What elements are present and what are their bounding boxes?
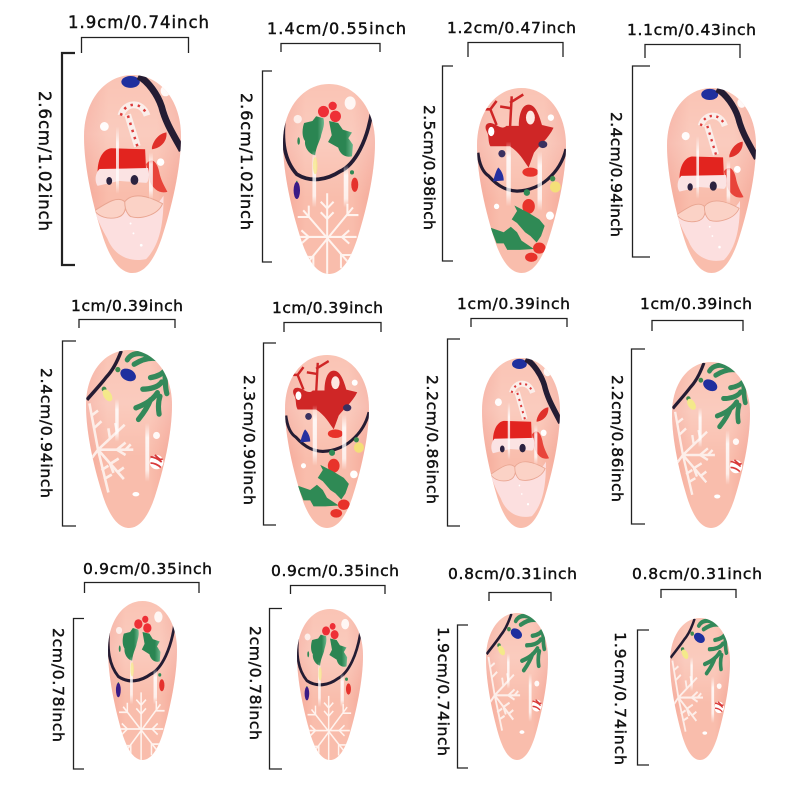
width label: 1.4cm/0.55inch (267, 19, 406, 38)
width label: 1.9cm/0.74inch (68, 13, 209, 32)
nail: branch (672, 362, 750, 528)
panel: nail 9 (49, 560, 212, 769)
width label: 1cm/0.39inch (71, 297, 183, 315)
width label: 0.8cm/0.31inch (632, 565, 762, 583)
panel: nail 12 (611, 565, 762, 765)
length label: 2.5cm/0.98inch (420, 105, 438, 230)
nail: reindeer (477, 88, 566, 273)
length label: 2.2cm/0.86inch (423, 375, 441, 504)
nail: holly (108, 601, 177, 760)
nail: santa (482, 358, 561, 528)
panel: nail 10 (246, 562, 399, 769)
length label: 2.6cm/1.02inch (237, 93, 256, 230)
width label: 0.9cm/0.35inch (83, 560, 212, 578)
length bracket (264, 343, 276, 525)
width bracket (471, 318, 567, 327)
width label: 1.1cm/0.43inch (627, 21, 756, 39)
length bracket (74, 618, 84, 769)
length label: 2.6cm/1.02inch (35, 91, 54, 231)
nail: reindeer (285, 355, 369, 528)
length bracket (270, 608, 282, 769)
panel: nail 8 (608, 295, 752, 528)
width bracket (284, 322, 381, 332)
width label: 1cm/0.39inch (640, 295, 752, 313)
nail: branch (86, 350, 172, 528)
length label: 2.3cm/0.90inch (240, 375, 258, 505)
nail: branch (486, 613, 548, 760)
width bracket (290, 586, 385, 594)
width bracket (652, 320, 743, 331)
length bracket (638, 630, 649, 765)
panel: nail 7 (423, 295, 570, 528)
panel: nail 2 (237, 19, 406, 274)
length label: 1.9cm/0.74inch (611, 632, 629, 765)
width bracket (489, 592, 551, 601)
length bracket (632, 349, 645, 524)
nail: santa (84, 75, 182, 273)
width label: 1cm/0.39inch (457, 295, 570, 313)
length bracket (442, 66, 453, 261)
nail: holly (283, 84, 375, 274)
width bracket (661, 590, 736, 598)
length bracket (632, 66, 650, 257)
panel: nail 11 (434, 565, 577, 768)
panel: nail 4 (607, 21, 757, 273)
width label: 1.2cm/0.47inch (447, 19, 576, 37)
length label: 2cm/0.78inch (246, 626, 264, 740)
length bracket (262, 71, 272, 262)
width bracket (84, 582, 199, 593)
panel: nail 1 (35, 13, 209, 273)
width label: 0.9cm/0.35inch (271, 562, 399, 580)
length bracket (62, 341, 76, 526)
length label: 2.2cm/0.86inch (608, 375, 626, 502)
width bracket (79, 320, 175, 328)
width bracket (468, 42, 563, 57)
length bracket (62, 53, 75, 265)
width label: 1cm/0.39inch (272, 299, 383, 317)
length label: 1.9cm/0.74inch (434, 627, 452, 756)
width bracket (645, 44, 740, 58)
nail: santa (667, 88, 757, 273)
length bracket (448, 339, 460, 526)
width label: 0.8cm/0.31inch (448, 565, 577, 583)
length label: 2cm/0.78inch (49, 628, 67, 742)
length label: 2.4cm/0.94inch (607, 112, 625, 237)
panel: nail 5 (37, 297, 183, 528)
length bracket (458, 625, 468, 768)
panel: nail 6 (240, 299, 383, 528)
width bracket (281, 44, 380, 52)
nail: branch (670, 618, 730, 760)
width bracket (82, 38, 188, 53)
length label: 2.4cm/0.94inch (37, 368, 55, 498)
panel: nail 3 (420, 19, 576, 273)
nail: holly (297, 609, 363, 760)
